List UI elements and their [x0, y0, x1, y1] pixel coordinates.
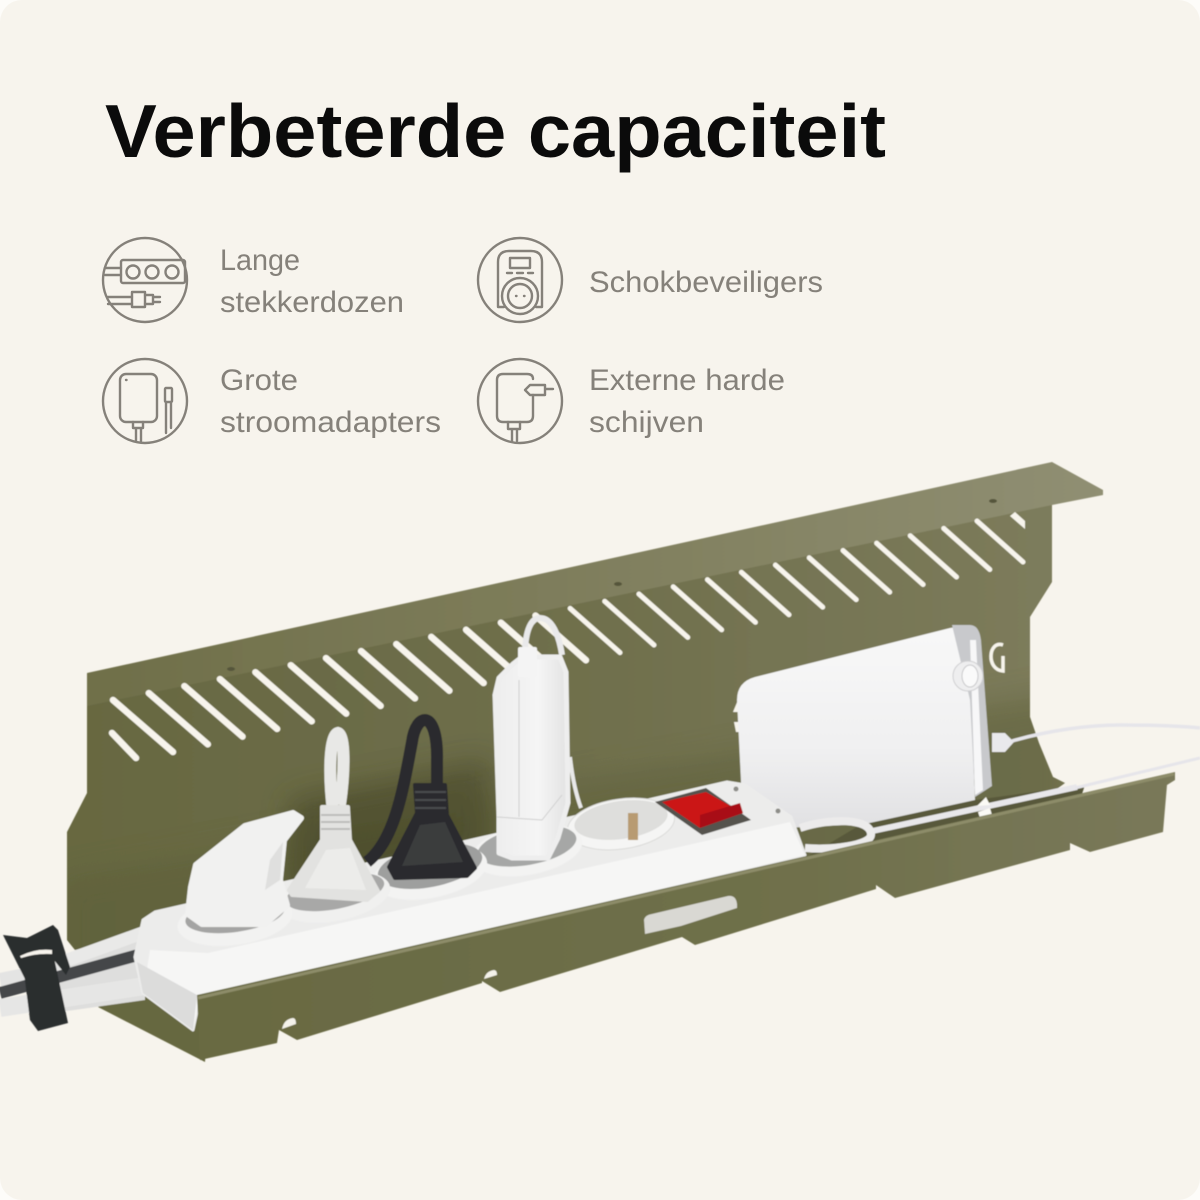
strap band	[22, 953, 68, 1031]
strap flap	[3, 925, 70, 985]
panel shading	[75, 694, 1064, 950]
socket 5 with pin	[564, 792, 678, 856]
icon: power strip	[103, 238, 187, 322]
cut-off slot at right	[1010, 512, 1025, 529]
lower cord thin	[1075, 758, 1200, 788]
strip front face	[143, 822, 805, 1030]
label: large power adapters: stroomadapters	[220, 406, 441, 439]
logo cut-out	[991, 644, 1003, 671]
adapter detail lines	[497, 680, 562, 820]
top flange	[87, 462, 1103, 706]
label: long power strips: Lange	[220, 244, 300, 277]
adapter highlight	[970, 640, 983, 795]
feature: external hard drives	[478, 359, 785, 443]
socket 2	[275, 863, 395, 931]
icon: power adapter	[103, 359, 187, 443]
cream gaps	[977, 797, 992, 818]
adapter upper cord	[1012, 725, 1200, 741]
grey plug	[289, 733, 378, 900]
tray hole 2	[484, 970, 497, 979]
adapter button	[953, 661, 983, 691]
power strip body	[135, 782, 805, 1030]
strip end facet	[137, 962, 197, 1030]
tray inner shadow	[805, 785, 1085, 858]
ventilation slots	[112, 521, 1023, 758]
product: cable tray with devices	[0, 462, 1200, 1062]
label: long power strips: stekkerdozen	[220, 286, 404, 319]
socket 3	[368, 835, 492, 909]
adapter metal edge	[952, 625, 992, 797]
red rocker switch	[655, 786, 780, 835]
feature: large power adapters	[103, 359, 441, 443]
adapter body	[737, 625, 975, 830]
label: external hard drives: Externe harde	[589, 364, 785, 397]
icon: external drive	[478, 359, 562, 443]
tray front wall	[197, 772, 1175, 1060]
cable loop	[800, 821, 871, 848]
adapter connector top	[518, 647, 537, 677]
lower cord	[868, 787, 1077, 832]
white angled plug	[188, 813, 301, 924]
tall adapter cord	[525, 618, 562, 655]
second cord of tall adapter	[570, 757, 581, 808]
black plug	[367, 720, 475, 878]
label: surge protectors: Schokbeveiligers	[589, 266, 823, 299]
tray hole 1	[282, 1018, 296, 1029]
label: external hard drives: schijven	[589, 406, 704, 439]
logo cut-out bits	[733, 700, 740, 732]
adapter connector	[992, 733, 1014, 752]
tray lip highlight	[198, 774, 1174, 998]
title: Verbeterde capaciteit	[105, 89, 886, 173]
tray slot	[644, 896, 737, 934]
strap slit	[20, 950, 52, 958]
flange screw holes	[227, 499, 997, 671]
socket 1	[174, 887, 296, 953]
left cables behind strip	[0, 926, 145, 1012]
large external adapter	[737, 625, 1014, 830]
feature: long power strips	[103, 238, 404, 322]
tray back panel	[67, 503, 1065, 1010]
tray floor	[98, 985, 210, 1062]
tall white adapter	[495, 657, 568, 858]
icon: surge protector	[478, 238, 562, 322]
socket 4	[468, 816, 586, 884]
plug shaded facet	[265, 842, 283, 890]
label: large power adapters: Grote	[220, 364, 298, 397]
feature: surge protectors	[478, 238, 823, 322]
velcro strap	[3, 925, 70, 1031]
